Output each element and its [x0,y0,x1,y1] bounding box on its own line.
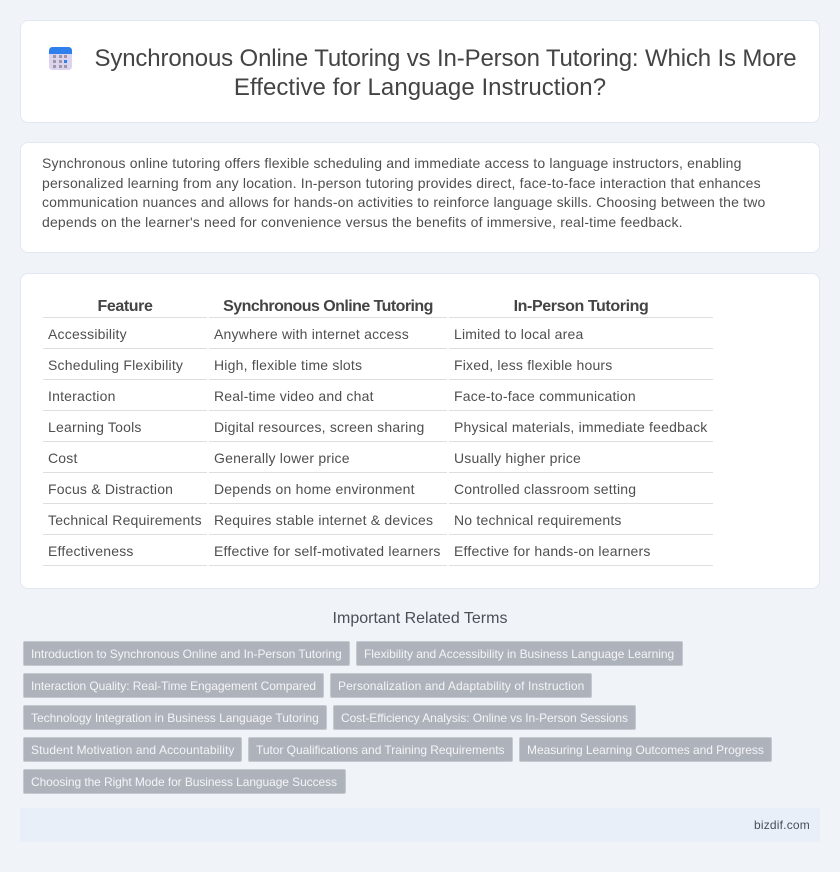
row: interaction: Real-time video and chat [214,388,374,404]
row: interaction [43,388,713,411]
row: cost: Usually higher price [454,450,581,466]
tag: Tutor Qualifications and Training Requirements [256,743,505,757]
tag [23,737,242,762]
row: cost [43,450,713,473]
tag [23,673,324,698]
row: learning tools: Physical materials, immediate feedback [454,419,707,435]
table header: Feature [98,298,152,315]
tag [519,737,772,762]
panel: title card [20,20,820,123]
tag: Interaction Quality: Real-Time Engagement Compared [31,679,316,693]
icon: calendar [49,47,72,70]
tag [23,705,327,730]
row: effectiveness: Effectiveness [48,543,134,559]
table header [43,298,713,318]
row: focus and distraction: Focus & Distraction [48,481,173,497]
tag: Choosing the Right Mode for Business Language Success [31,775,337,789]
tag [23,769,346,794]
row: scheduling flexibility [43,357,713,380]
tag: Flexibility and Accessibility in Business Language Learning [364,647,674,661]
row: learning tools: Learning Tools [48,419,142,435]
row: interaction: Face-to-face communication [454,388,636,404]
row: focus and distraction: Depends on home environment [214,481,415,497]
tag [248,737,513,762]
footer: source: bizdif.com [754,818,810,832]
tag: Cost-Efficiency Analysis: Online vs In-Person Sessions [341,711,628,725]
tag: Personalization and Adaptability of Instruction [338,679,584,693]
row: scheduling flexibility: High, flexible time slots [214,357,362,373]
row: accessibility: Limited to local area [454,326,584,342]
row: scheduling flexibility: Scheduling Flexibility [48,357,183,373]
text block: introduction: depends on the learner's need for convenience versus the benefits of immersive, real-time feedback. [42,214,683,230]
table header: In-Person Tutoring [514,298,648,315]
title: Synchronous Online Tutoring vs In-Person Tutoring: Which Is More [94,45,797,72]
title: Effective for Language Instruction? [234,74,606,100]
row: effectiveness: Effective for hands-on learners [454,543,651,559]
panel: comparison table [20,273,820,589]
row: technical requirements: Technical Requirements [48,512,202,528]
tag: Measuring Learning Outcomes and Progress [527,743,764,757]
text block: introduction: Synchronous online tutoring offers flexible scheduling and immediate access to language instructors, enabling [42,155,742,171]
row: cost: Generally lower price [214,450,350,466]
tag [333,705,636,730]
row: effectiveness [43,543,713,566]
panel: introduction [20,142,820,253]
text block: introduction: personalized learning from any location. In-person tutoring provides direct, face-to-face interaction that enhances [42,175,761,191]
tag: Introduction to Synchronous Online and In-Person Tutoring [31,647,342,661]
row: technical requirements: No technical requirements [454,512,622,528]
heading: important related terms: Important Related Terms [333,610,507,627]
tag [330,673,592,698]
row: learning tools [43,419,713,442]
row: focus and distraction [43,481,713,504]
row: technical requirements: Requires stable internet & devices [214,512,433,528]
text block: introduction [42,155,766,230]
row: focus and distraction: Controlled classroom setting [454,481,636,497]
row: cost: Cost [48,450,78,466]
row: accessibility: Accessibility [48,326,127,342]
table header: Synchronous Online Tutoring [223,298,433,315]
tag [356,641,683,666]
row: learning tools: Digital resources, screen sharing [214,419,424,435]
tag: Technology Integration in Business Language Tutoring [31,711,319,725]
row: accessibility: Anywhere with internet access [214,326,409,342]
footer [20,808,820,842]
row: interaction: Interaction [48,388,116,404]
tag: Student Motivation and Accountability [31,743,235,757]
row: effectiveness: Effective for self-motivated learners [214,543,441,559]
row: technical requirements [43,512,713,535]
title [94,45,797,100]
row: scheduling flexibility: Fixed, less flexible hours [454,357,612,373]
tags: related terms [23,641,772,794]
tag [23,641,350,666]
text block: introduction: communication nuances and allows for hands-on activities to reinforce language skills. Choosing between the two [42,194,766,210]
row: accessibility [43,326,713,349]
